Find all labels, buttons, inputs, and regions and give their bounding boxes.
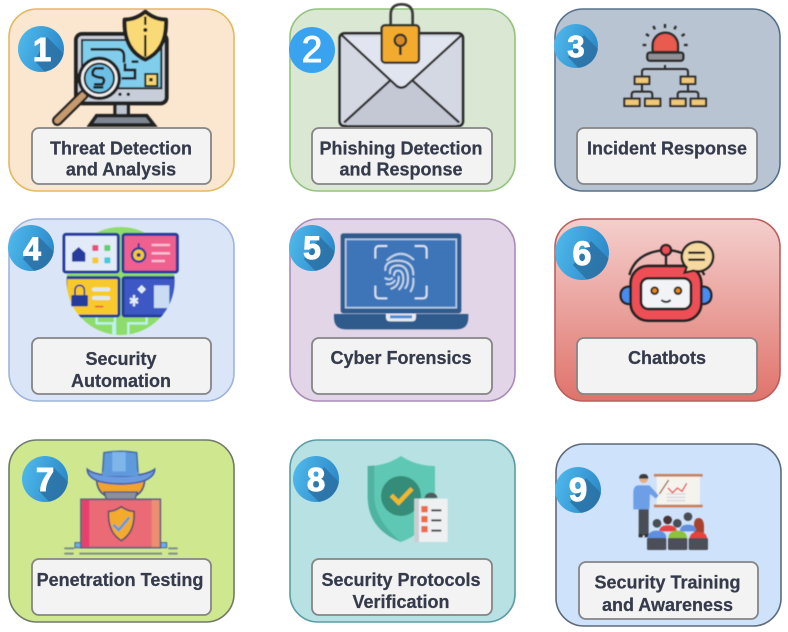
label box: Cyber Forensics: Cyber Forensics [330, 348, 472, 368]
label box: Security Protocols Verification: Verification [352, 592, 450, 612]
badge 3: 3 [567, 29, 585, 64]
badge 1: 1 [33, 31, 51, 68]
badge 5 [289, 225, 335, 271]
label box: Security Automation: Automation [71, 371, 171, 391]
icon: laptop with fingerprint [334, 233, 468, 329]
label box: Penetration Testing: Penetration Testing [37, 570, 203, 590]
panel: Incident Response [554, 9, 780, 191]
badge 6: 6 [573, 235, 591, 273]
label box: Security Automation: Security [85, 349, 157, 369]
panel: Security Training and Awareness [555, 444, 781, 626]
icon: robot with speech bubble [621, 242, 713, 321]
icon: envelope with padlock [340, 4, 463, 126]
badge 4: 4 [23, 231, 41, 267]
badge 8 [293, 456, 339, 502]
panel: Cyber Forensics [289, 219, 515, 401]
panel: Security Protocols Verification [290, 440, 515, 622]
icon: shield with checklist [368, 456, 448, 542]
badge 9: 9 [569, 471, 587, 508]
badge 9 [555, 467, 601, 513]
badge 6 [555, 226, 609, 280]
label box: Chatbots [577, 338, 757, 394]
label box: Security Training and Awareness: and Awareness [602, 595, 733, 615]
panel: Phishing Detection and Response [289, 4, 515, 191]
badge 1 [18, 26, 64, 72]
label box: Incident Response: Incident Response [587, 138, 747, 158]
badge 7: 7 [36, 461, 54, 498]
badge 5: 5 [303, 230, 321, 266]
label box: Phishing Detection and Response: and Response [339, 160, 463, 180]
icon: monitor with magnifier and shield [57, 12, 167, 125]
panel: Chatbots [555, 219, 780, 401]
label box: Phishing Detection and Response: Phishing Detection [319, 138, 483, 158]
panel: Penetration Testing [9, 440, 234, 622]
badge 7 [22, 456, 68, 502]
badge 2 [289, 27, 335, 73]
label box: Chatbots: Chatbots [628, 348, 706, 368]
badge 4 [8, 225, 54, 271]
panel: Security Automation [8, 219, 234, 401]
badge 2: 2 [302, 29, 322, 70]
label box: Security Protocols Verification [312, 559, 492, 615]
icon: hacker behind laptop [64, 451, 178, 554]
icon: automation dashboard panels [63, 227, 180, 337]
label box: Phishing Detection and Response [312, 128, 492, 184]
badge 3 [554, 24, 598, 68]
label box: Security Protocols Verification: Security Protocols [321, 570, 481, 590]
icon: trainer and audience [633, 474, 708, 550]
label box: Security Automation [32, 338, 211, 394]
badge 8: 8 [307, 461, 325, 498]
label box: Threat Detection and Analysis: Threat Detection [50, 138, 192, 158]
label box: Cyber Forensics [312, 338, 492, 394]
label box: Penetration Testing [32, 559, 211, 615]
label box: Threat Detection and Analysis: and Analysis [66, 160, 176, 180]
label box: Incident Response [577, 128, 757, 184]
label box: Threat Detection and Analysis [32, 128, 211, 184]
panel: Threat Detection and Analysis [9, 9, 234, 191]
label box: Security Training and Awareness: Security Training [594, 572, 741, 592]
label box: Security Training and Awareness [579, 562, 758, 619]
icon: siren over hierarchy [624, 24, 706, 106]
